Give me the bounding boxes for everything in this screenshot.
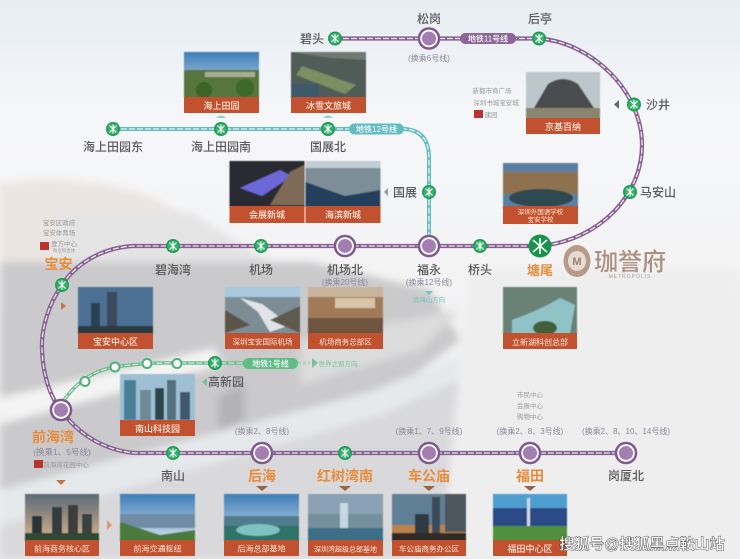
stations: bottom row: 红树湾南 (317, 468, 373, 484)
stations: line 11 north (300, 11, 676, 200)
photo card: 京基百纳 (526, 72, 600, 134)
small note: Shajing landmarks: 新都市商广场 (472, 86, 512, 95)
stations: line 12: 海上田园东 (83, 139, 143, 154)
station: high-tech park: 世界之窗方向 (318, 359, 358, 368)
logo: Metropolis (564, 245, 666, 280)
photo card: 冰雪文旅城: 冰雪文旅城 (306, 100, 351, 111)
photo card: 宝安中心区: 宝安中心区 (93, 336, 138, 347)
photo card: 会展新城 (230, 161, 304, 223)
stations: bottom row: 岗厦北 (608, 469, 644, 483)
stations: line 11 north: 马安山 (640, 184, 676, 200)
photo card: 海上田园 (184, 52, 259, 113)
line 11 route (42, 38, 642, 453)
stations: bottom row: 福田 (516, 468, 544, 484)
small note: Futian landmarks: 购物中心 (517, 412, 544, 421)
stations: bottom row: 后海 (248, 468, 276, 484)
photo card: 深圳湾超级总部基地: 深圳湾超级总部基地 (314, 544, 377, 554)
photo card: 立新湖科创总部: 立新湖科创总部 (512, 337, 568, 347)
stations: line 11 north: 碧头 (300, 32, 324, 46)
logo: Metropolis: METROPOLIS (609, 274, 651, 280)
stations: line 11 north: 后亭 (528, 11, 552, 26)
stations: middle row: 宝安 (44, 256, 72, 272)
photo card: 冰雪文旅城 (291, 52, 366, 113)
stations: bottom row: 南山 (161, 468, 185, 483)
photo card: 南山科技园: 南山科技园 (135, 423, 180, 434)
line 12 label pill: 地铁12号线 (356, 124, 397, 134)
photo card: 机场商务总部区 (308, 287, 383, 349)
stations: middle row: 桥头 (468, 262, 492, 277)
photo card: 南山科技园 (120, 374, 195, 436)
photo card: 福田中心区 (493, 494, 567, 556)
line 12 label pill (349, 124, 404, 134)
stations: line 12: 海上田园南 (191, 139, 251, 154)
stations: line 12: 国展北 (310, 140, 346, 154)
stations: middle row (44, 234, 553, 310)
small note: Shajing landmarks: 深圳书城宝安城 (473, 98, 519, 107)
stations: middle row: (换乘20号线) (322, 277, 368, 287)
photo card: 宝安中心区 (78, 287, 153, 349)
photo card: 立新湖科创总部 (503, 287, 577, 349)
stations: middle row: 塘尾 (527, 263, 553, 278)
logo: Metropolis: M (572, 256, 582, 268)
stations: middle row: (换乘12号线) (406, 277, 452, 287)
photo card: 车公庙 (392, 494, 466, 556)
stations: line 11 north: (换乘6号线) (408, 53, 450, 63)
photo card: 深圳外国语学校: 深圳外国语学校 (518, 207, 564, 216)
photo card: 海滨新城 (306, 161, 380, 223)
stations: middle row: 福永 (417, 262, 441, 277)
photo card: 前海交通枢纽 (120, 494, 195, 556)
stations: middle row: 机场北 (327, 263, 363, 277)
small note: Shajing landmarks: 建园 (484, 110, 498, 119)
stations: bottom row: (换乘1、7、9号线) (396, 426, 463, 436)
logo: Metropolis: 珈誉府 (594, 249, 666, 276)
station: high-tech park (202, 356, 358, 389)
stations: bottom row: (换乘1、5号线) (33, 447, 91, 457)
stations: bottom row: (换乘2、8、10、14号线) (582, 426, 670, 436)
line 1 route (64, 359, 310, 400)
photo card: 前海交通枢纽: 前海交通枢纽 (134, 544, 182, 554)
photo card: 深圳外国语学校 (503, 163, 578, 224)
line 1 label pill: 地铁1号线 (252, 358, 289, 368)
photo card: 深圳宝安国际机场 (225, 287, 300, 349)
line 12 route (113, 116, 429, 236)
photo card: 前海商务核心区 (25, 494, 99, 556)
stations: bottom row: (换乘2、8号线) (235, 426, 289, 436)
watermark: 搜狐号@搜狐黑点鞍山站 (559, 535, 725, 553)
small note: Baoan landmarks: 宝安区政府 (43, 218, 76, 227)
photo card: 海上田园: 海上田园 (203, 100, 240, 111)
photo card: 福田中心区: 福田中心区 (507, 543, 553, 554)
small note: Futian landmarks: 市民中心 (517, 390, 544, 399)
small note: Futian landmarks (517, 390, 544, 421)
stations: middle row: 碧海湾 (155, 262, 191, 277)
photo card: 海滨新城: 海滨新城 (325, 209, 361, 220)
photo card: 京基百纳: 京基百纳 (545, 121, 581, 132)
stations: line 11 north: 松岗 (417, 12, 441, 26)
line 11 label pill (460, 33, 516, 44)
stations: bottom row: 前海湾花园中心 (43, 460, 89, 469)
small note: Baoan landmarks: 商业综合体 (53, 247, 76, 254)
photo card: 深圳宝安国际机场: 深圳宝安国际机场 (232, 336, 293, 346)
photo card: 会展新城: 会展新城 (249, 209, 285, 220)
stations: bottom row: 前海湾 (32, 429, 74, 445)
stations: bottom row: (换乘2、8、3号线) (497, 426, 564, 436)
photo card: 深圳湾超级总部基地 (308, 494, 383, 556)
photo card: 深圳外国语学校: 宝安学校 (528, 214, 554, 224)
photo card: 后海总部基地 (224, 494, 299, 556)
small note: Futian landmarks: 会展中心 (517, 401, 544, 410)
small note: Baoan landmarks (40, 218, 78, 254)
small note: Baoan landmarks: 宝安体育场 (43, 228, 76, 237)
stations: line 12 (83, 122, 436, 200)
photo card: 车公庙: 车公庙商务办公区 (399, 544, 459, 554)
stations: line 11 north: 沙井 (646, 98, 670, 112)
photo card: 后海总部基地: 后海总部基地 (238, 544, 286, 554)
stations: middle row: 滨海山方向 (413, 295, 445, 304)
line 11 label pill: 地铁11号线 (468, 34, 508, 44)
small note: Shajing landmarks (472, 86, 519, 119)
stations: bottom row: 车公庙 (408, 468, 450, 484)
photo card: 前海商务核心区: 前海商务核心区 (34, 544, 90, 554)
stations: bottom row (32, 399, 670, 530)
stations: middle row: 机场 (249, 263, 273, 277)
line 1 label pill (243, 358, 298, 369)
stations: line 12: 国展 (393, 186, 417, 200)
photo card: 机场商务总部区: 机场商务总部区 (319, 336, 372, 346)
small note: Baoan landmarks: 壹方中心 (51, 239, 78, 248)
station: high-tech park: 高新园 (208, 374, 244, 389)
